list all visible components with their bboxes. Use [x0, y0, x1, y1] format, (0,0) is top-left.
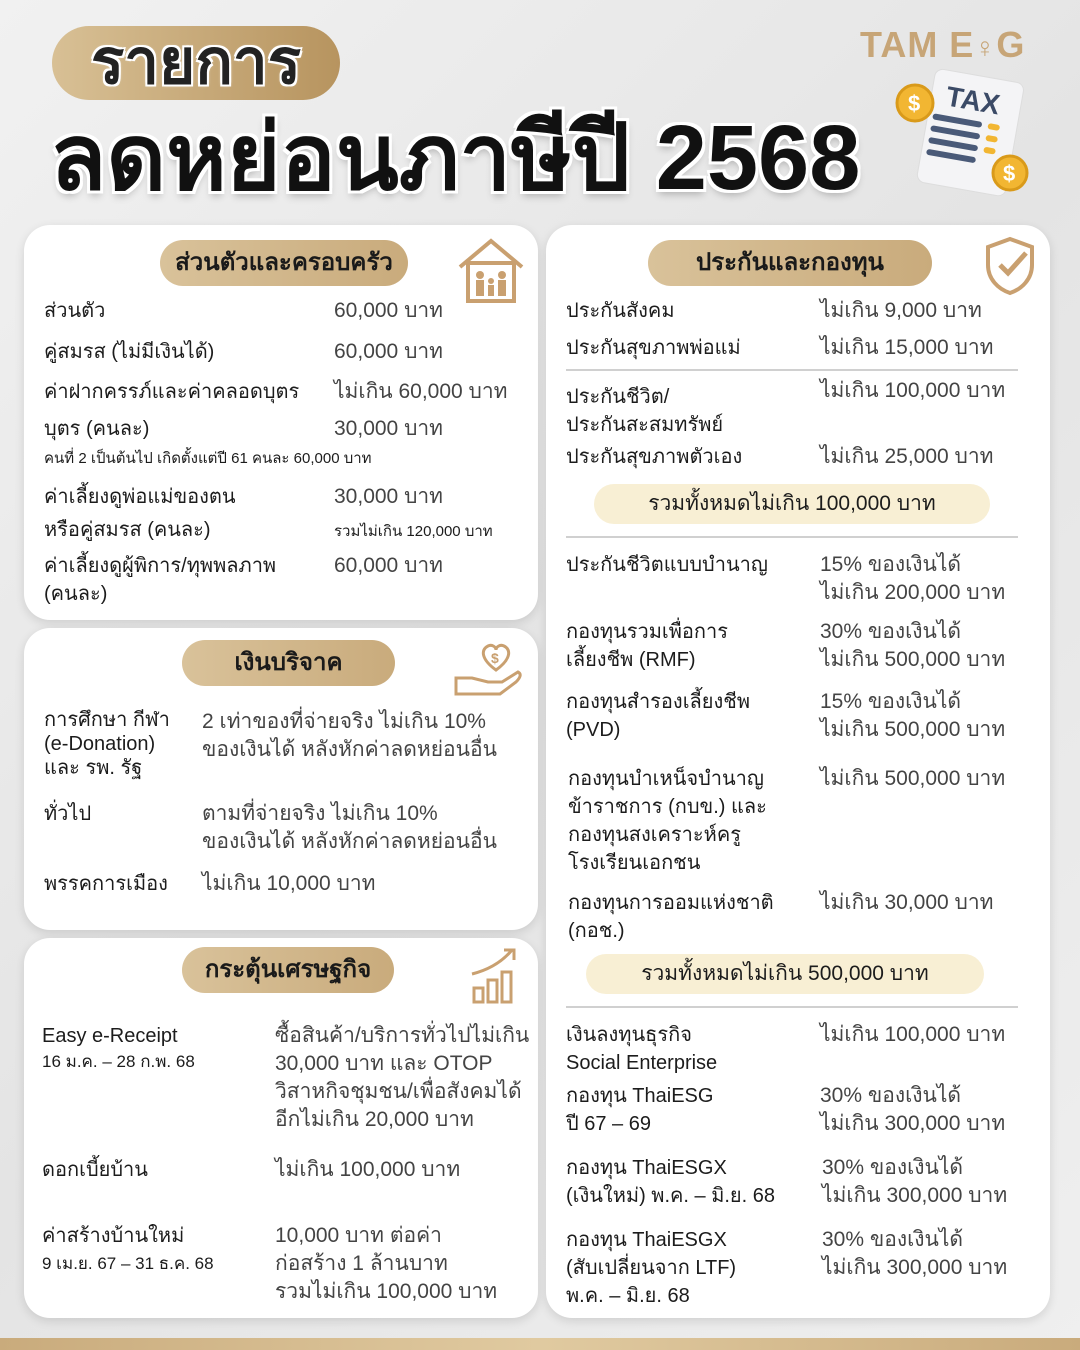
panel: personal & family: ค่าเลี้ยงดูผู้พิการ/ทุพพลภาพ	[44, 555, 276, 577]
title pill: รายการ	[52, 26, 340, 100]
heading: ประกันและกองทุน	[696, 249, 884, 276]
heading: ส่วนตัวและครอบครัว	[175, 249, 393, 276]
panel: donations: ทั่วไป	[44, 803, 91, 825]
panel: insurance & funds: เงินลงทุนธุรกิจ	[566, 1024, 692, 1046]
panel: economic stimulus: 10,000 บาท ต่อค่า	[275, 1224, 442, 1247]
panel: insurance & funds: 15% ของเงินได้	[820, 690, 961, 713]
panel: insurance & funds: กองทุนรวมเพื่อการ	[566, 621, 728, 643]
panel: economic stimulus: Easy e-Receipt	[42, 1025, 178, 1047]
panel: insurance & funds: ไม่เกิน 500,000 บาท	[820, 718, 1005, 741]
summary pill 2	[586, 954, 984, 994]
panel: insurance & funds: ประกันชีวิต/	[566, 386, 669, 408]
panel: insurance & funds: (กอช.)	[568, 920, 625, 942]
heading: เงินบริจาค	[234, 649, 343, 676]
panel: economic stimulus: 16 ม.ค. – 28 ก.พ. 68	[42, 1052, 195, 1071]
panel: personal & family: ค่าฝากครรภ์และค่าคลอดบุตร	[44, 381, 299, 403]
panel: insurance & funds: ไม่เกิน 30,000 บาท	[820, 891, 994, 914]
panel: donations: ตามที่จ่ายจริง ไม่เกิน 10%	[202, 802, 438, 825]
panel: personal & family: (คนละ)	[44, 583, 107, 605]
icon: tax document: $	[908, 91, 920, 116]
icon: hand heart	[454, 644, 522, 696]
panel: personal & family: รวมไม่เกิน 120,000 บาท	[334, 523, 493, 540]
title pill: รายการ: รายการ	[91, 28, 301, 97]
panel: personal & family: 30,000 บาท	[334, 485, 443, 508]
panel: personal & family: ไม่เกิน 60,000 บาท	[334, 380, 508, 403]
panel: insurance & funds: ไม่เกิน 200,000 บาท	[820, 581, 1005, 604]
panel: insurance & funds: ไม่เกิน 300,000 บาท	[820, 1112, 1005, 1135]
panel: personal & family: 60,000 บาท	[334, 554, 443, 577]
panel: personal & family: 60,000 บาท	[334, 299, 443, 322]
panel: insurance & funds: (สับเปลี่ยนจาก LTF)	[566, 1257, 736, 1279]
panel: insurance & funds: กองทุนบำเหน็จบำนาญ	[568, 768, 764, 790]
panel: insurance & funds: ไม่เกิน 500,000 บาท	[820, 648, 1005, 671]
summary pill 1	[594, 484, 990, 524]
panel: personal & family: 60,000 บาท	[334, 340, 443, 363]
summary pill 1: รวมทั้งหมดไม่เกิน 100,000 บาท	[648, 492, 936, 515]
panel: insurance & funds: 30% ของเงินได้	[820, 1084, 961, 1107]
panel: donations: และ รพ. รัฐ	[44, 757, 142, 779]
panel: insurance & funds: ประกันชีวิตแบบบำนาญ	[566, 554, 768, 576]
panel: personal & family: คนที่ 2 เป็นต้นไป เกิดตั้งแต่ปี 61 คนละ 60,000 บาท	[44, 450, 372, 467]
panel: personal & family: 30,000 บาท	[334, 417, 443, 440]
panel: economic stimulus: รวมไม่เกิน 100,000 บาท	[275, 1280, 497, 1303]
panel: insurance & funds: 30% ของเงินได้	[820, 620, 961, 643]
panel: economic stimulus	[24, 938, 538, 1318]
panel: insurance & funds: Social Enterprise	[566, 1052, 717, 1074]
panel: personal & family: บุตร (คนละ)	[44, 418, 149, 440]
panel: donations: ของเงินได้ หลังหักค่าลดหย่อนอื่น	[202, 738, 497, 761]
panel: donations: พรรคการเมือง	[44, 873, 168, 895]
panel: insurance & funds: ประกันสุขภาพตัวเอง	[566, 446, 742, 468]
panel: insurance & funds: ไม่เกิน 15,000 บาท	[820, 336, 994, 359]
panel: economic stimulus: ไม่เกิน 100,000 บาท	[275, 1158, 460, 1181]
panel: insurance & funds: เลี้ยงชีพ (RMF)	[566, 649, 696, 671]
panel: economic stimulus: ก่อสร้าง 1 ล้านบาท	[275, 1252, 448, 1275]
panel: donations: ไม่เกิน 10,000 บาท	[202, 872, 376, 895]
panel: insurance & funds: 15% ของเงินได้	[820, 553, 961, 576]
panel: economic stimulus: 9 เม.ย. 67 – 31 ธ.ค. 68	[42, 1254, 214, 1273]
panel: insurance & funds: พ.ค. – มิ.ย. 68	[566, 1285, 690, 1307]
panel: insurance & funds: ข้าราชการ (กบข.) และ	[568, 796, 767, 818]
panel: insurance & funds: กองทุน ThaiESGX	[566, 1157, 727, 1179]
panel: economic stimulus: ดอกเบี้ยบ้าน	[42, 1159, 148, 1181]
panel: insurance & funds: ประกันสะสมทรัพย์	[566, 414, 723, 436]
panel: insurance & funds: ไม่เกิน 25,000 บาท	[820, 445, 994, 468]
panel: economic stimulus: อีกไม่เกิน 20,000 บาท	[275, 1108, 474, 1131]
panel: insurance & funds: ประกันสังคม	[566, 300, 674, 322]
panel: insurance & funds: กองทุน ThaiESG	[566, 1085, 713, 1107]
panel: insurance & funds: ไม่เกิน 300,000 บาท	[822, 1184, 1007, 1207]
icon: shield check	[986, 236, 1034, 296]
panel: insurance & funds: ไม่เกิน 300,000 บาท	[822, 1256, 1007, 1279]
panel: insurance & funds: กองทุน ThaiESGX	[566, 1229, 727, 1251]
panel: insurance & funds: ไม่เกิน 100,000 บาท	[820, 1023, 1005, 1046]
panel: insurance & funds: ไม่เกิน 100,000 บาท	[820, 379, 1005, 402]
panel: insurance & funds: ประกันสุขภาพพ่อแม่	[566, 337, 741, 359]
panel: donations: 2 เท่าของที่จ่ายจริง ไม่เกิน 10%	[202, 710, 486, 733]
panel: insurance & funds: 30% ของเงินได้	[822, 1156, 963, 1179]
panel: insurance & funds: ไม่เกิน 9,000 บาท	[820, 299, 982, 322]
panel: insurance & funds: กองทุนสำรองเลี้ยงชีพ	[566, 691, 750, 713]
heading	[182, 640, 395, 686]
heading	[648, 240, 932, 286]
panel: personal & family: คู่สมรส (ไม่มีเงินได้)	[44, 341, 214, 363]
panel: economic stimulus: ค่าสร้างบ้านใหม่	[42, 1225, 184, 1247]
panel: insurance & funds: กองทุนสงเคราะห์ครู	[568, 824, 741, 846]
panel: insurance & funds: กองทุนการออมแห่งชาติ	[568, 892, 774, 914]
panel: insurance & funds: ไม่เกิน 500,000 บาท	[820, 767, 1005, 790]
logo: TAM E♀G	[860, 24, 1025, 65]
panel: economic stimulus: ซื้อสินค้า/บริการทั่วไปไม่เกิน	[275, 1024, 529, 1047]
bottom bar	[0, 1338, 1080, 1350]
panel: economic stimulus: 30,000 บาท และ OTOP	[275, 1052, 493, 1075]
panel: insurance & funds: (PVD)	[566, 719, 620, 741]
heading	[182, 947, 394, 993]
panel: personal & family: หรือคู่สมรส (คนละ)	[44, 519, 211, 541]
panel: economic stimulus: วิสาหกิจชุมชน/เพื่อสังคมได้	[275, 1080, 522, 1103]
title main: ลดหย่อนภาษีปี 2568	[50, 107, 860, 209]
panel: donations: (e-Donation)	[44, 733, 155, 755]
icon: house family	[458, 238, 524, 303]
panel: insurance & funds: (เงินใหม่) พ.ค. – มิ.ย. 68	[566, 1185, 775, 1207]
panel: insurance & funds: 30% ของเงินได้	[822, 1228, 963, 1251]
panel: insurance & funds	[546, 225, 1050, 1318]
rows: ส่วนตัว	[44, 300, 105, 322]
panel: personal & family	[24, 225, 538, 620]
heading	[160, 240, 408, 286]
panel: donations: ของเงินได้ หลังหักค่าลดหย่อนอื่น	[202, 830, 497, 853]
panel: personal & family: ค่าเลี้ยงดูพ่อแม่ของตน	[44, 486, 236, 508]
icon: tax document	[896, 69, 1028, 195]
icon: tax document: $	[1003, 161, 1015, 186]
icon: tax document: TAX	[944, 81, 1003, 120]
panel: insurance & funds: ปี 67 – 69	[566, 1113, 651, 1135]
heading: กระตุ้นเศรษฐกิจ	[205, 956, 371, 983]
panel: donations	[24, 628, 538, 930]
icon: growth chart	[472, 948, 516, 1004]
icon: hand heart: $	[491, 650, 499, 666]
panel: donations: การศึกษา กีฬา	[44, 709, 170, 731]
summary pill 2: รวมทั้งหมดไม่เกิน 500,000 บาท	[641, 962, 929, 985]
panel: insurance & funds: โรงเรียนเอกชน	[568, 852, 700, 874]
